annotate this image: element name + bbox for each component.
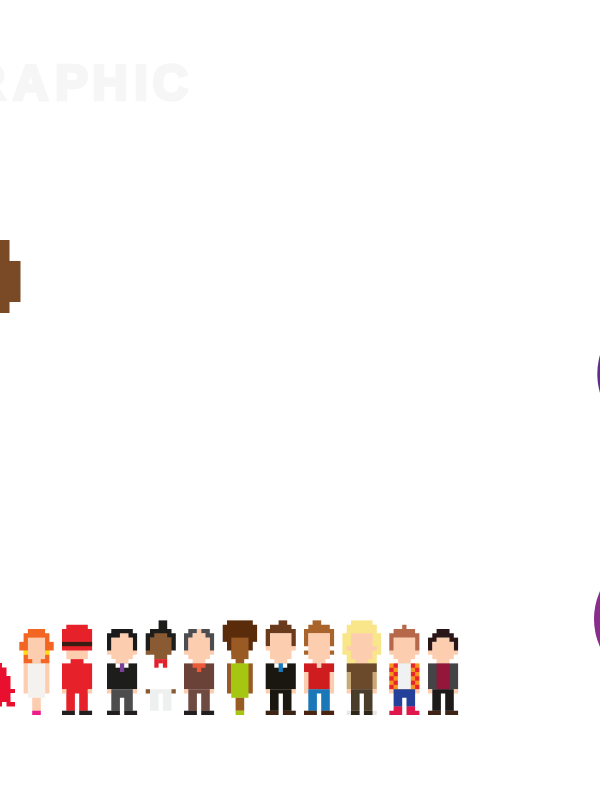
icon: cropped magenta circle bbox=[594, 551, 600, 687]
character: man in black suit with blue tie bbox=[266, 620, 296, 715]
icon: cropped brown pixel shape bbox=[0, 240, 20, 313]
character: man in grey jacket and crimson shirt bbox=[428, 629, 458, 715]
character: man in red hat and red suit bbox=[62, 625, 92, 715]
icon: cropped red pixel character bbox=[0, 663, 15, 706]
icon: cropped purple circle bbox=[597, 306, 600, 442]
character: orange-haired woman in white dress bbox=[19, 629, 54, 715]
character: balding man in brown suit bbox=[184, 629, 214, 715]
character: man in red t-shirt and blue jeans bbox=[304, 620, 334, 715]
character: brown-skinned woman in white with red scarf bbox=[146, 620, 176, 711]
character: man in plaid shirt and red boots bbox=[389, 625, 419, 715]
character: blond man in brown shirt bbox=[342, 620, 381, 715]
character: woman with afro in green dress bbox=[223, 620, 257, 715]
character: man in black suit with purple tie bbox=[107, 629, 137, 715]
